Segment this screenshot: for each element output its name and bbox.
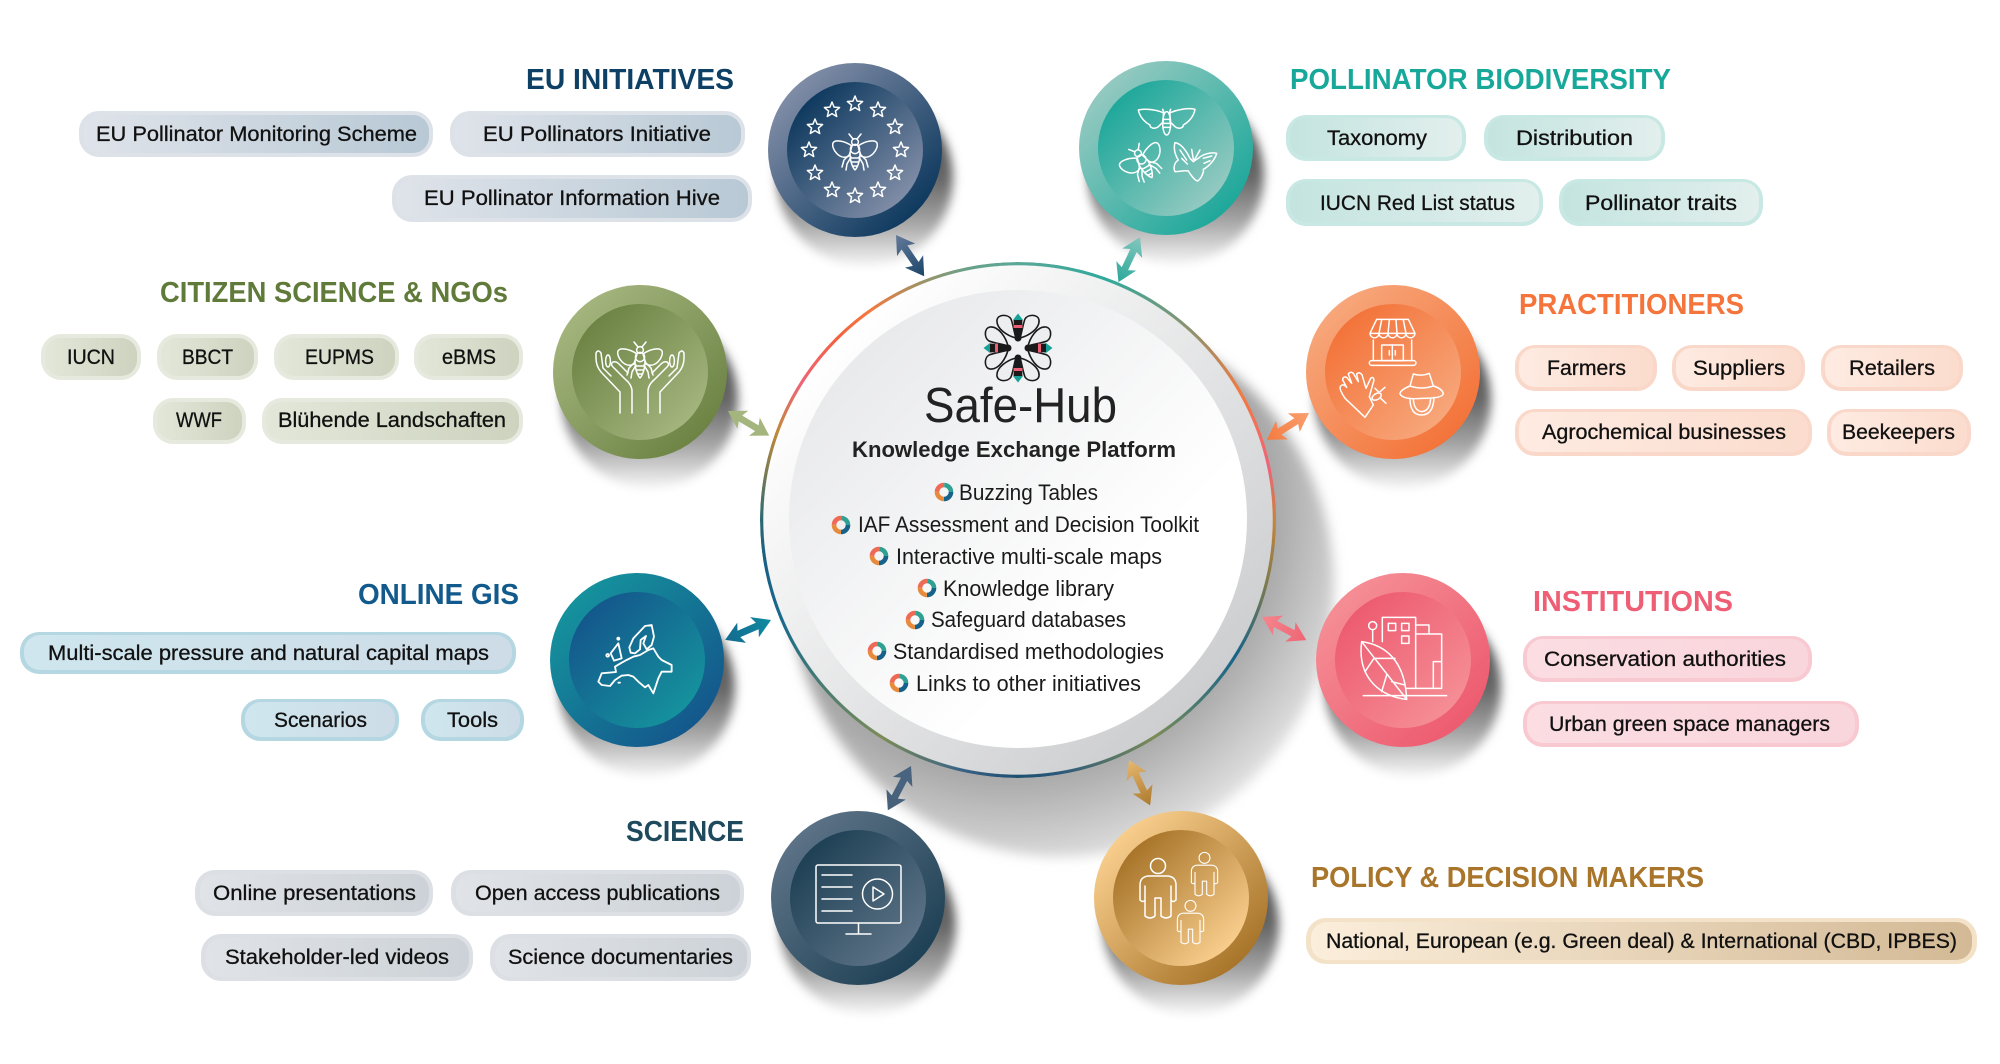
pill: Urban green space managers: Urban green space managers bbox=[1549, 713, 1830, 736]
pill: Scenarios: Scenarios bbox=[274, 709, 367, 732]
pill: Online presentations bbox=[195, 870, 433, 916]
pill: Blühende Landschaften bbox=[262, 398, 523, 444]
icon: monitor with video bbox=[816, 865, 901, 934]
pill: EU Pollinators Initiative bbox=[450, 111, 745, 157]
pill: Pollinator traits bbox=[1559, 179, 1763, 226]
item: standardised methodologies: Standardised methodologies bbox=[893, 639, 1164, 664]
pill: BBCT bbox=[157, 334, 258, 380]
pill: Open access publications: Open access publications bbox=[475, 882, 720, 905]
pill: Retailers: Retailers bbox=[1849, 357, 1935, 380]
pill: EU Pollinators Initiative: EU Pollinators Initiative bbox=[483, 123, 711, 146]
pill: Multi-scale maps bbox=[20, 632, 516, 674]
pill: Taxonomy: Taxonomy bbox=[1327, 127, 1428, 150]
subtitle: Knowledge Exchange Platform bbox=[852, 437, 1176, 462]
pill: Beekeepers: Beekeepers bbox=[1842, 421, 1955, 444]
pill: Taxonomy bbox=[1286, 115, 1466, 161]
pill: Distribution: Distribution bbox=[1516, 127, 1633, 150]
icon: bee in EU stars bbox=[801, 96, 909, 202]
pill: WWF: WWF bbox=[176, 409, 222, 432]
pill: Tools: Tools bbox=[447, 709, 498, 732]
node: citizen science and NGOs bbox=[553, 285, 738, 488]
arrow: citizen science to hub bbox=[723, 402, 775, 445]
node: pollinator biodiversity bbox=[1079, 61, 1264, 264]
heading: PRACTITIONERS bbox=[1519, 289, 1744, 321]
panel: institutions labels bbox=[1523, 586, 1859, 747]
item: knowledge library: Knowledge library bbox=[943, 576, 1114, 601]
node: online GIS bbox=[550, 573, 735, 776]
pill: National, European and International: National, European (e.g. Green deal) & International (CBD, IPBES) bbox=[1326, 930, 1957, 953]
pill: EU Pollinator Monitoring Scheme: EU Pollinator Monitoring Scheme bbox=[96, 123, 417, 146]
heading: CITIZEN SCIENCE & NGOs bbox=[160, 277, 508, 309]
pill: IUCN: IUCN bbox=[67, 346, 115, 369]
arrow: institutions to hub bbox=[1257, 607, 1311, 650]
heading: INSTITUTIONS bbox=[1533, 586, 1733, 618]
pill: IUCN Red List status bbox=[1286, 179, 1543, 226]
item: links: Links to other initiatives bbox=[916, 671, 1141, 696]
pill: Scenarios bbox=[241, 699, 399, 741]
pill: Agrochemical businesses bbox=[1515, 409, 1812, 456]
heading: ONLINE GIS bbox=[358, 579, 519, 611]
pill: Open access publications bbox=[451, 870, 744, 916]
panel: EU initiatives labels bbox=[79, 64, 752, 222]
pill: Conservation authorities bbox=[1523, 636, 1812, 682]
node: practitioners bbox=[1306, 285, 1491, 488]
panel: science labels bbox=[195, 816, 751, 981]
ring: multicolour hub outline bbox=[760, 262, 1276, 778]
icon: shop, glove and beekeeper bbox=[1340, 319, 1443, 417]
icon: buildings and leaf bbox=[1361, 617, 1447, 699]
node: EU initiatives bbox=[768, 63, 953, 266]
pill: eBMS: eBMS bbox=[442, 346, 496, 369]
pill: Distribution bbox=[1484, 115, 1665, 161]
pill: National, European and International bbox=[1306, 918, 1977, 964]
pill: Blühende Landschaften: Blühende Landschaften bbox=[278, 409, 506, 432]
icon: map of Europe bbox=[598, 625, 672, 693]
pill: EUPMS bbox=[274, 334, 399, 380]
heading: EU INITIATIVES bbox=[526, 64, 734, 96]
pill: Online presentations: Online presentations bbox=[213, 882, 416, 905]
disc: inner face bbox=[789, 290, 1247, 748]
pill: Pollinator traits: Pollinator traits bbox=[1585, 192, 1737, 215]
pill: EUPMS: EUPMS bbox=[305, 346, 374, 369]
pill: EU Pollinator Information Hive bbox=[392, 175, 752, 222]
panel: citizen science labels bbox=[41, 277, 523, 444]
disc: outer bevel bbox=[762, 264, 1274, 776]
pill: Farmers bbox=[1515, 345, 1657, 391]
pill: Agrochemical businesses: Agrochemical businesses bbox=[1542, 421, 1786, 444]
title: Safe-Hub: Safe-Hub bbox=[924, 379, 1117, 433]
pill: Stakeholder-led videos bbox=[201, 934, 473, 981]
pill: Conservation authorities: Conservation authorities bbox=[1544, 648, 1786, 671]
node: institutions bbox=[1316, 573, 1501, 776]
node: science bbox=[771, 811, 956, 1014]
logo: four bees bbox=[984, 314, 1052, 382]
pill: BBCT: BBCT bbox=[182, 346, 233, 369]
arrow: science to hub bbox=[878, 761, 921, 815]
shadow: central disc bbox=[790, 313, 1334, 857]
pill: EU Pollinator Information Hive: EU Pollinator Information Hive bbox=[424, 187, 720, 210]
pill: eBMS bbox=[414, 334, 523, 380]
arrow: EU to hub bbox=[887, 229, 933, 283]
pill: Farmers: Farmers bbox=[1547, 357, 1626, 380]
arrow: policy to hub bbox=[1119, 755, 1160, 810]
pill: Suppliers: Suppliers bbox=[1693, 357, 1785, 380]
pill: Science documentaries: Science documentaries bbox=[508, 946, 733, 969]
node: policy and decision makers bbox=[1094, 811, 1279, 1014]
pill: EU Pollinator Monitoring Scheme bbox=[79, 111, 433, 157]
panel: central Safe-Hub hub bbox=[762, 264, 1274, 776]
panel: practitioners labels bbox=[1515, 289, 1971, 456]
pill: Suppliers bbox=[1672, 345, 1805, 391]
pill: Beekeepers bbox=[1827, 409, 1971, 456]
arrow: practitioners to hub bbox=[1261, 404, 1315, 449]
item: Buzzing Tables: Buzzing Tables bbox=[959, 480, 1098, 505]
pill: Urban green space managers bbox=[1523, 701, 1859, 747]
pill: Science documentaries bbox=[490, 934, 751, 981]
pill: IUCN bbox=[41, 334, 141, 380]
heading: POLLINATOR BIODIVERSITY bbox=[1290, 64, 1671, 96]
item: interactive maps: Interactive multi-scale maps bbox=[896, 544, 1162, 569]
arrow: GIS to hub bbox=[721, 610, 775, 650]
pill: Retailers bbox=[1821, 345, 1963, 391]
arrow: biodiversity to hub bbox=[1109, 232, 1150, 287]
pill: WWF bbox=[153, 398, 246, 444]
heading: POLICY & DECISION MAKERS bbox=[1311, 862, 1704, 894]
icon: three people bbox=[1140, 852, 1218, 944]
icon: moth, bee and butterfly bbox=[1115, 109, 1217, 189]
pill: Stakeholder-led videos: Stakeholder-led videos bbox=[225, 946, 449, 969]
panel: online GIS labels bbox=[20, 579, 524, 741]
pill: Multi-scale maps: Multi-scale pressure and natural capital maps bbox=[48, 642, 489, 665]
item: safeguard databases: Safeguard databases bbox=[931, 607, 1126, 632]
panel: policy labels bbox=[1306, 862, 1977, 964]
pill: Tools bbox=[421, 699, 524, 741]
icon: hands holding bee bbox=[596, 342, 684, 413]
pill: IUCN Red List status: IUCN Red List status bbox=[1320, 192, 1515, 215]
list: platform tools bbox=[834, 480, 1199, 696]
item: IAF toolkit: IAF Assessment and Decision Toolkit bbox=[858, 512, 1199, 537]
heading: SCIENCE bbox=[626, 816, 744, 848]
panel: pollinator biodiversity labels bbox=[1286, 64, 1763, 226]
